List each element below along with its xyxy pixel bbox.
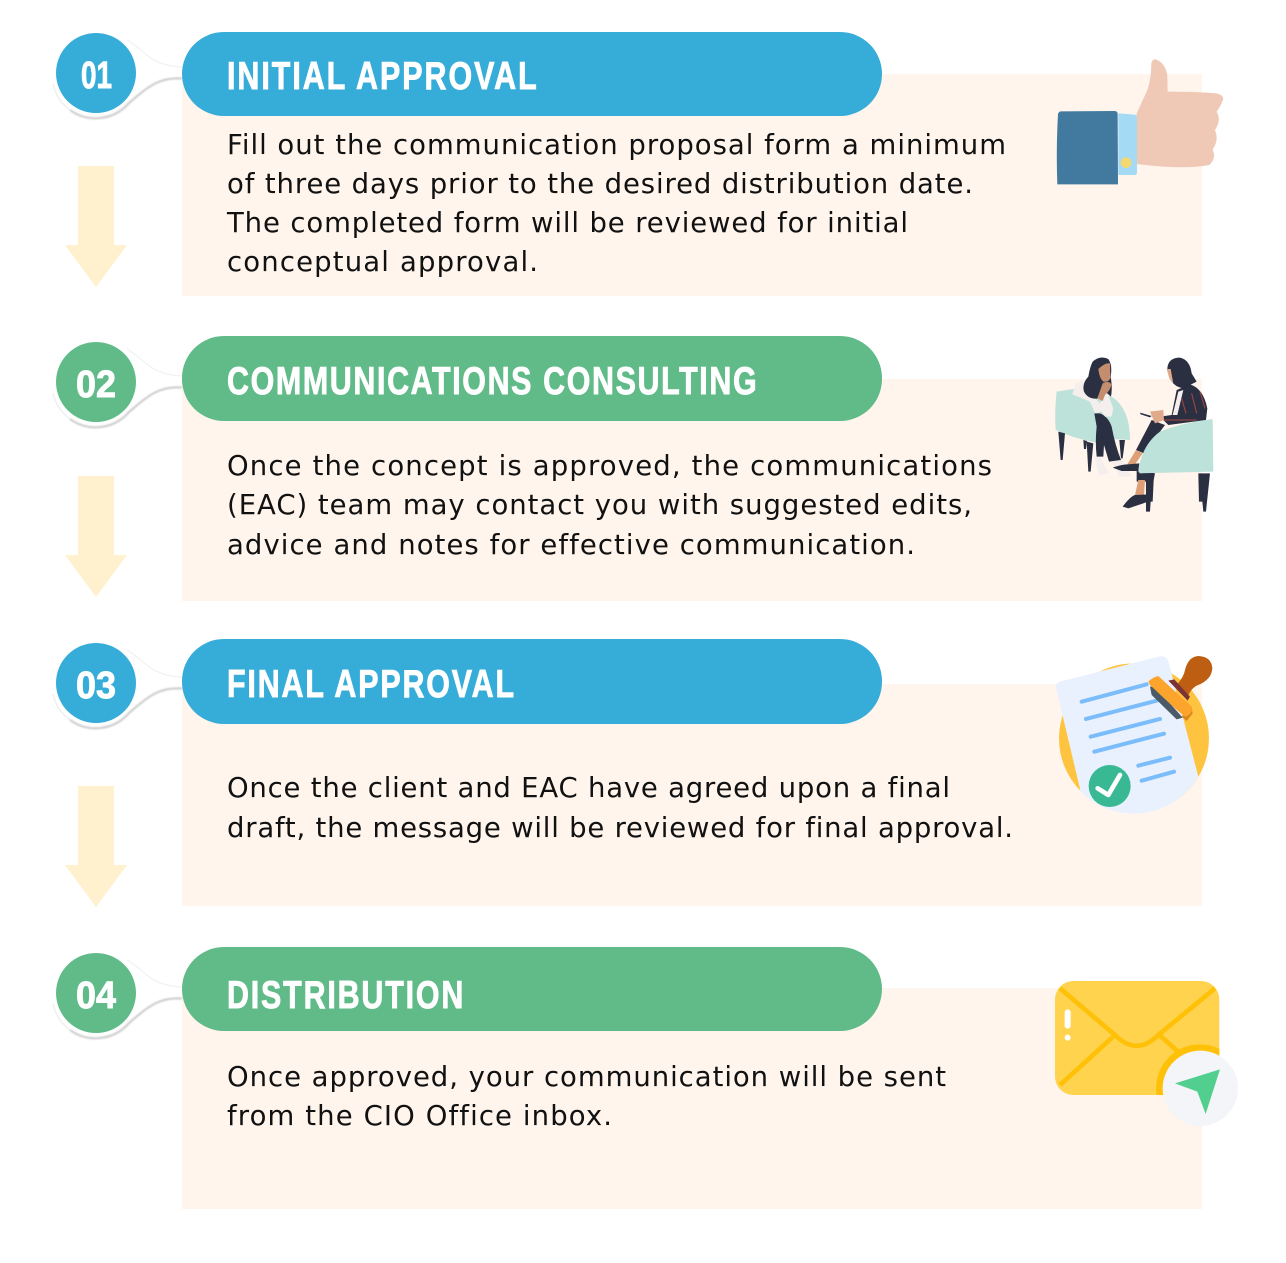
arrow: step 1 to step 2 <box>65 166 127 287</box>
text block: step 2 description: advice and notes for effective communication. <box>227 529 915 561</box>
text block: step 4 description <box>227 1061 946 1132</box>
heading pill: final approval <box>182 639 882 724</box>
connector and number badge 02 <box>53 342 182 427</box>
text block: step 2 description: Once the concept is approved, the communications <box>227 450 992 482</box>
icon: envelope with send arrow <box>1055 981 1244 1132</box>
text block: step 1 description: conceptual approval. <box>227 246 538 278</box>
connector and number badge 01: 01 <box>81 55 112 97</box>
text block: step 2 description <box>227 450 992 561</box>
connector and number badge 01 <box>53 33 182 118</box>
connector and number badge 03 <box>53 643 182 728</box>
text block: step 1 description: The completed form will be reviewed for initial <box>226 207 908 239</box>
text block: step 1 description <box>226 129 1006 278</box>
icon: stamped document with check mark <box>1056 656 1212 814</box>
heading pill: initial approval <box>182 32 882 116</box>
text block: step 3 description: draft, the message will be reviewed for final approval. <box>227 812 1013 844</box>
text block: step 1 description: Fill out the communication proposal form a minimum <box>227 129 1006 161</box>
text block: step 3 description: Once the client and EAC have agreed upon a final <box>227 772 950 804</box>
connector and number badge 04: 04 <box>76 975 116 1017</box>
heading pill: communications consulting: COMMUNICATIONS CONSULTING <box>227 359 757 403</box>
text block: step 4 description: from the CIO Office inbox. <box>227 1100 612 1132</box>
heading pill: initial approval: INITIAL APPROVAL <box>227 54 537 98</box>
icon: thumbs up <box>1057 59 1223 184</box>
connector and number badge 03: 03 <box>76 665 116 707</box>
arrow: step 3 to step 4 <box>65 786 127 907</box>
text block: step 4 description: Once approved, your communication will be sent <box>227 1061 946 1093</box>
panel: step 3 final approval <box>53 639 1212 906</box>
heading pill: final approval: FINAL APPROVAL <box>227 662 514 706</box>
icon: two people consulting in chairs <box>1055 357 1213 512</box>
connector and number badge 02: 02 <box>76 364 116 406</box>
text block: step 2 description: (EAC) team may contact you with suggested edits, <box>227 489 972 521</box>
panel: step 1 initial approval <box>53 32 1223 296</box>
connector and number badge 04 <box>53 953 182 1038</box>
heading pill: communications consulting <box>182 336 882 421</box>
heading pill: distribution <box>182 947 882 1031</box>
text block: step 1 description: of three days prior to the desired distribution date. <box>227 168 973 200</box>
text block: step 3 description <box>227 772 1013 844</box>
heading pill: distribution: DISTRIBUTION <box>227 973 463 1017</box>
arrow: step 2 to step 3 <box>65 476 127 597</box>
panel: step 2 communications consulting <box>53 336 1213 601</box>
panel: step 4 distribution <box>53 947 1244 1209</box>
